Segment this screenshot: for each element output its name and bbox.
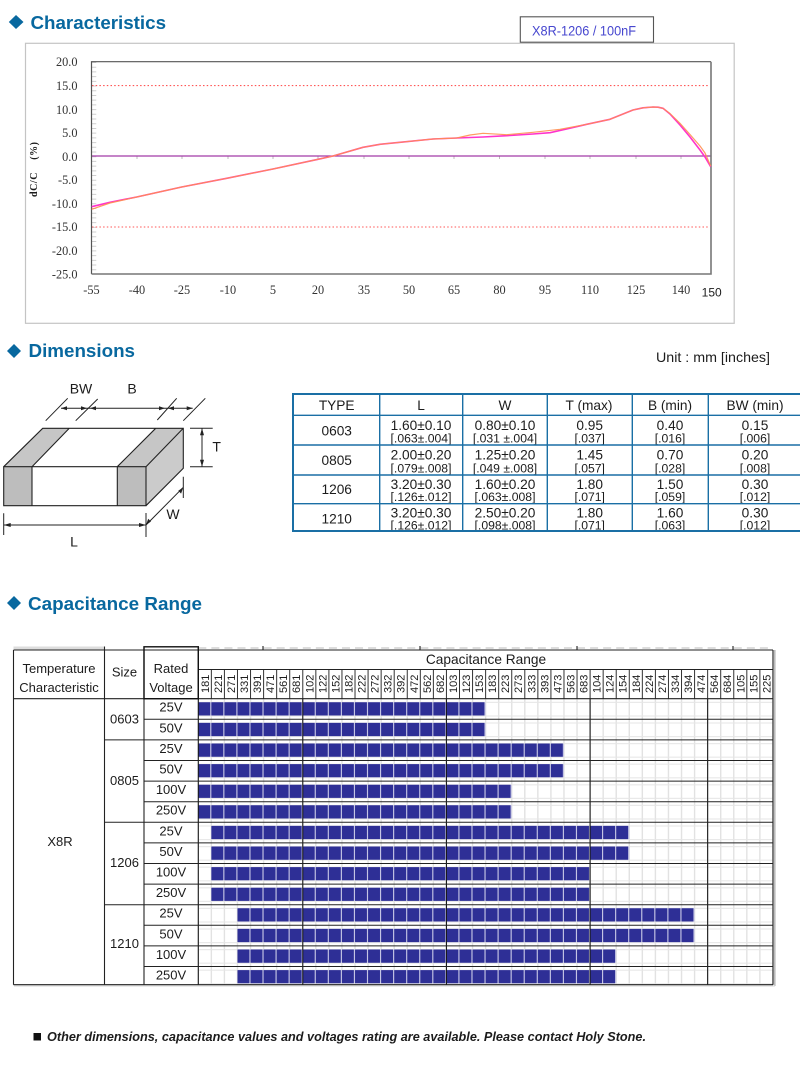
row: 1210	[321, 505, 770, 532]
table: capacitance range	[14, 646, 776, 987]
table header row	[319, 398, 784, 413]
table: dimensions by type	[293, 394, 800, 532]
capacitance code labels: 221	[213, 675, 225, 693]
column headers: Voltage	[149, 680, 193, 695]
capacitance code labels: 393	[539, 675, 551, 693]
diagram: chip component with dimensions: W	[166, 506, 180, 522]
diagram: chip component with dimensions: BW	[70, 380, 93, 396]
row: 0603: 1.60±0.10	[391, 418, 452, 433]
capacitance code labels: 155	[748, 675, 760, 693]
rated voltage labels: 50V	[159, 844, 183, 859]
size labels: 1206	[110, 855, 139, 870]
row: 1210: [.098±.008]	[475, 518, 535, 532]
heading: characteristics: Characteristics	[30, 12, 166, 33]
x axis labels: 35	[358, 283, 370, 297]
capacitance code labels: 153	[474, 675, 486, 693]
diagram: chip component with dimensions: L	[70, 534, 78, 550]
x axis labels: -25	[174, 283, 190, 297]
row: 0805: [.079±.008]	[391, 461, 451, 475]
capacitance code labels: 103	[448, 675, 460, 693]
capacitance code labels: 181	[200, 675, 212, 693]
capacitance code labels: 271	[226, 675, 238, 693]
capacitance code labels: 224	[644, 675, 656, 693]
capacitance code labels: 334	[670, 675, 682, 693]
diagram: chip component with dimensions: B	[127, 380, 137, 396]
capacitance code labels: 331	[239, 675, 251, 693]
rated voltage labels: 100V	[156, 864, 187, 880]
label box: part number: X8R-1206 / 100nF	[532, 22, 636, 38]
row: 1206	[321, 477, 770, 504]
capacitance code labels: 561	[278, 675, 290, 693]
x axis labels: 150	[702, 286, 722, 300]
row: 1210: 2.50±0.20	[475, 505, 536, 520]
x axis labels: 20	[312, 283, 324, 297]
row: 1210: [.063]	[655, 518, 685, 532]
row: 0603: 0603	[321, 424, 352, 439]
table header row: B (min)	[648, 398, 692, 413]
icon: characteristics diamond	[9, 15, 24, 29]
unit note: Unit : mm [inches]	[656, 349, 770, 365]
x axis labels: 80	[493, 283, 506, 297]
rated voltage labels: 50V	[159, 926, 183, 941]
capacitance code labels: 184	[631, 675, 643, 693]
capacitance code labels: 274	[657, 675, 669, 693]
capacitance code labels: 104	[592, 675, 604, 693]
capacitance code labels: 391	[252, 675, 264, 693]
column headers: Capacitance Range	[426, 652, 546, 667]
size labels: 1210	[110, 936, 139, 951]
row: 0603: [.063±.004]	[391, 431, 451, 445]
row: 1206: [.071]	[574, 490, 605, 504]
table header row: L	[417, 398, 425, 413]
row: 1210: [.012]	[740, 518, 770, 532]
y axis labels: 10.0	[56, 103, 78, 117]
row: 1206: 1.60±0.20	[475, 477, 536, 492]
capacitance code labels: 223	[500, 675, 512, 693]
x axis labels: -10	[220, 283, 236, 297]
column headers: Size	[112, 665, 137, 680]
row: 1206: 1.50	[657, 477, 684, 492]
row: 0805: 0.70	[657, 448, 684, 463]
section: capacitance range	[7, 593, 776, 987]
heading: capacitance range: Capacitance Range	[28, 593, 202, 614]
row: 1206: [.063±.008]	[475, 490, 535, 504]
capacitance bars: X8R 0603	[198, 709, 486, 730]
row: 0603: [.006]	[740, 431, 770, 445]
row: 0603: 0.95	[576, 418, 603, 433]
y axis labels: -15.0	[52, 220, 78, 234]
y axis labels: 15.0	[56, 79, 78, 93]
row: 0805: 2.00±0.20	[391, 448, 452, 463]
size labels: 0603	[110, 712, 139, 727]
capacitance code labels: 682	[435, 675, 447, 693]
diagram: chip component with dimensions: T	[212, 439, 221, 455]
capacitance code labels: 473	[552, 675, 564, 693]
capacitance code labels: 471	[265, 675, 277, 693]
capacitance code labels: 472	[409, 675, 421, 693]
row: 0603: [.031 ±.004]	[473, 431, 537, 445]
row: 1210: 3.20±0.30	[391, 505, 452, 520]
rated voltage labels: 250V	[156, 885, 187, 900]
row: 0805: 1.45	[576, 448, 603, 463]
diagram: chip component with dimensions	[4, 380, 221, 550]
row: 0603: 0.40	[657, 418, 684, 433]
row: 0603: [.016]	[655, 431, 685, 445]
row: 0603: 0.15	[742, 418, 769, 433]
rated voltage labels: 250V	[156, 968, 187, 982]
row: 0805: [.028]	[655, 461, 685, 475]
capacitance code labels: 183	[487, 675, 499, 693]
row: 1206: [.059]	[655, 490, 685, 504]
column headers	[19, 652, 546, 695]
light cell grid	[198, 702, 774, 984]
panel: chart frame	[26, 43, 734, 323]
y axis labels	[52, 55, 78, 282]
capacitance bars: X8R 1206	[211, 832, 629, 894]
y axis labels: -25.0	[52, 268, 78, 282]
capacitance code labels: 123	[461, 675, 473, 693]
row: 0805: 0805	[321, 453, 352, 468]
row: 0805	[321, 448, 770, 475]
x axis labels: 140	[672, 283, 690, 297]
capacitance code labels: 182	[344, 675, 356, 693]
rated voltage labels: 50V	[159, 762, 183, 776]
column headers: Rated	[154, 661, 188, 676]
row: 1210: 0.30	[742, 505, 769, 520]
label box: part number	[520, 17, 654, 42]
table header row: TYPE	[319, 398, 355, 413]
capacitance code labels: 681	[291, 675, 303, 693]
heading: dimensions: Dimensions	[28, 340, 135, 361]
row: 0805: 0.20	[742, 448, 769, 463]
row: 0603: 0.80±0.10	[475, 418, 536, 433]
capacitance code labels: 564	[709, 675, 721, 693]
x axis labels: 125	[627, 283, 645, 297]
row: 0805: [.008]	[740, 461, 770, 475]
rated voltage labels: 250V	[156, 803, 187, 818]
rated voltage labels: 25V	[159, 741, 183, 756]
y axis labels: 5.0	[62, 126, 78, 140]
capacitance code labels: 333	[526, 675, 538, 693]
capacitance code labels: 474	[696, 675, 708, 693]
row: 1206: 3.20±0.30	[391, 477, 452, 492]
capacitance code labels: 332	[383, 675, 395, 693]
capacitance bars: X8R 1210	[237, 915, 695, 977]
section: characteristics	[9, 12, 734, 323]
row: 0603: [.037]	[574, 431, 605, 445]
y axis title: dC/C (%)	[29, 142, 40, 197]
line chart: capacitance change versus temperature	[92, 62, 711, 274]
section: dimensions	[4, 340, 800, 550]
rated voltage labels: 25V	[159, 700, 183, 715]
icon: dimensions diamond	[7, 344, 21, 358]
capacitance code labels: 154	[618, 675, 630, 693]
x axis labels	[83, 283, 722, 300]
x axis labels: -55	[83, 283, 100, 297]
capacitance code labels: 394	[683, 675, 695, 693]
x axis labels: 5	[270, 283, 276, 297]
row: 1210: [.126±.012]	[391, 518, 451, 532]
y axis labels: -5.0	[58, 173, 78, 187]
x axis labels: -40	[129, 283, 145, 297]
capacitance code labels: 562	[422, 675, 434, 693]
capacitance code labels: 105	[735, 675, 747, 693]
table header row: BW (min)	[726, 398, 784, 413]
capacitance code labels: 102	[304, 675, 316, 693]
size labels	[110, 712, 139, 951]
capacitance bars: X8R 0805	[198, 750, 564, 812]
row: 1210: 1.60	[657, 505, 684, 520]
capacitance code labels: 152	[330, 675, 342, 693]
capacitance code labels: 225	[761, 675, 773, 693]
table header row: W	[499, 398, 512, 413]
rated voltage labels: 25V	[159, 906, 183, 921]
x axis labels: 95	[539, 283, 551, 297]
row: 1206: 1.80	[576, 477, 603, 492]
rated voltage labels	[156, 700, 187, 982]
capacitance code labels: 222	[356, 675, 368, 693]
capacitance code labels: 392	[396, 675, 408, 693]
row: 1206: [.126±.012]	[391, 490, 451, 504]
capacitance code labels: 563	[566, 675, 578, 693]
rated voltage labels: 100V	[156, 947, 187, 962]
y axis labels: 0.0	[62, 150, 78, 164]
y axis labels: -20.0	[52, 244, 78, 258]
capacitance code labels: 272	[370, 675, 382, 693]
x axis labels: 50	[403, 283, 415, 297]
y axis labels: -10.0	[52, 197, 78, 211]
capacitance code labels: 122	[317, 675, 329, 693]
row: 1210: 1.80	[576, 505, 603, 520]
column headers: Temperature	[23, 661, 95, 676]
icon: capacitance range diamond	[7, 596, 21, 610]
capacitance code labels: 684	[722, 675, 734, 693]
rated voltage labels: 100V	[156, 782, 187, 797]
row: 1206: [.012]	[740, 490, 770, 504]
capacitance code labels	[200, 675, 773, 693]
row: 1206: 1206	[321, 482, 352, 497]
capacitance code labels: 124	[605, 675, 617, 693]
row: 0603	[321, 418, 770, 445]
size labels: 0805	[110, 773, 139, 788]
footer note: Other dimensions, capacitance values and voltages rating are available. Please contact Holy Stone.	[47, 1030, 646, 1044]
row: 1206: 0.30	[742, 477, 769, 492]
row: 0805: 1.25±0.20	[475, 448, 536, 463]
rated voltage labels: 25V	[159, 823, 183, 838]
table header row: T (max)	[566, 398, 612, 413]
capacitance code labels: 683	[578, 675, 590, 693]
x axis labels: 65	[448, 283, 460, 297]
rated voltage labels: 50V	[159, 720, 183, 735]
capacitance code labels: 273	[513, 675, 525, 693]
column headers: Characteristic	[19, 680, 99, 695]
row: 1210: 1210	[321, 511, 352, 526]
y axis labels: 20.0	[56, 55, 78, 69]
temperature characteristic label: X8R	[47, 834, 73, 849]
row: 0805: [.049 ±.008]	[473, 461, 537, 475]
x axis labels: 110	[581, 283, 599, 297]
row: 1210: [.071]	[574, 518, 605, 532]
row: 0805: [.057]	[574, 461, 605, 475]
